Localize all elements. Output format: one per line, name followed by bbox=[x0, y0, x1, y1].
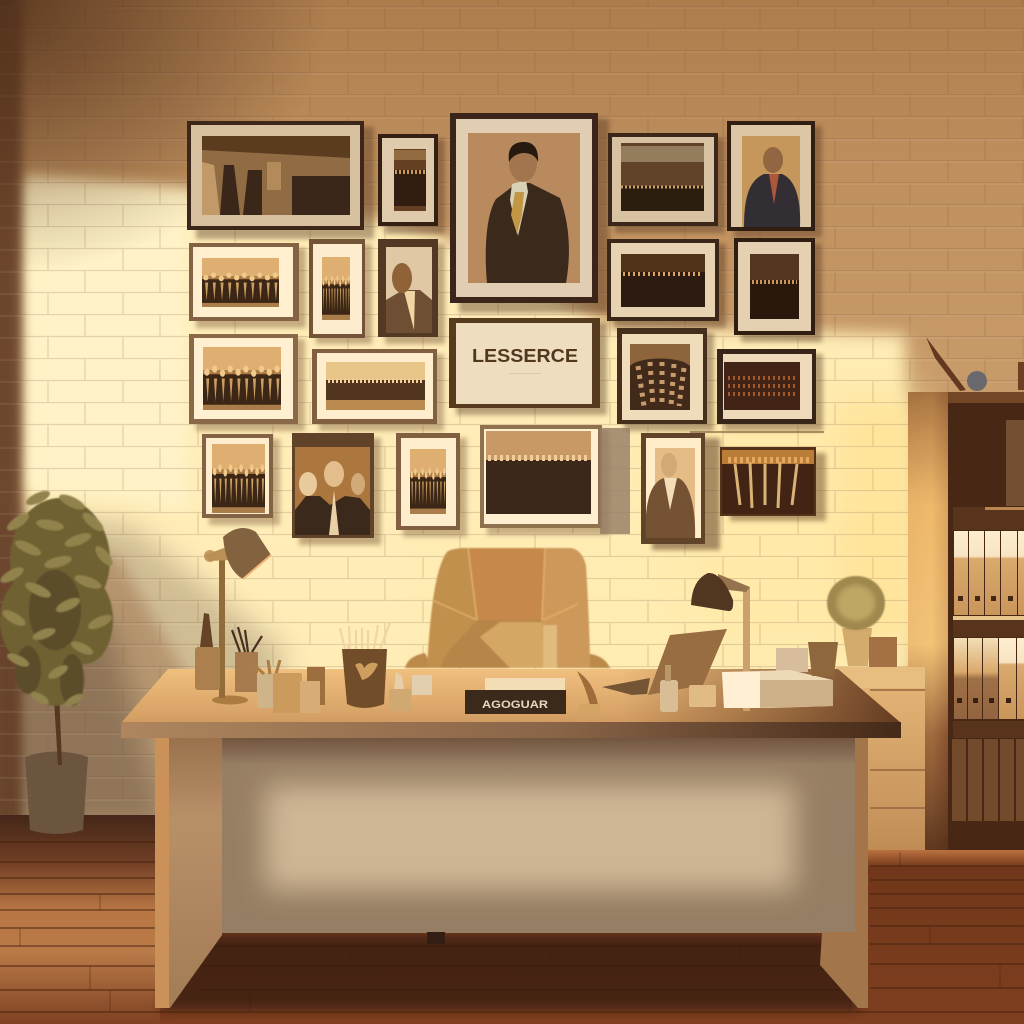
framed photo: crowd row 2 right bbox=[734, 238, 822, 342]
nameplate label: AGOGUAR bbox=[482, 699, 548, 711]
window shaped shadow beside frame bbox=[600, 428, 630, 534]
desk front edge bbox=[121, 722, 901, 738]
plant trunk bbox=[54, 690, 62, 765]
sign small caption: —— —— —— —— bbox=[509, 371, 541, 375]
chair base foot bbox=[427, 932, 445, 944]
small jar bbox=[389, 689, 411, 711]
paper block bbox=[412, 675, 432, 695]
right desk leg bbox=[820, 738, 868, 1008]
framed photo: sepia group dark frame bbox=[720, 447, 826, 521]
small box bbox=[869, 637, 897, 667]
framed photo: colourful crowd bbox=[617, 328, 714, 431]
binders lower shelf bbox=[952, 739, 1024, 821]
framed photo: group row 2 left bbox=[189, 243, 306, 328]
chair centre panel bbox=[468, 548, 545, 620]
framed portrait: man in dark suit bbox=[450, 113, 609, 313]
laptop bbox=[602, 629, 727, 695]
framed photo: dark crowd bbox=[717, 349, 823, 431]
binders middle shelf bbox=[954, 638, 1024, 719]
papers bbox=[776, 648, 808, 672]
framed sign: LESSERCE bbox=[449, 318, 607, 415]
bookcase interior bbox=[948, 392, 1024, 850]
framed photo: narrow crowd row 4 bbox=[396, 433, 467, 537]
stacked white box bbox=[722, 670, 833, 708]
framed photo: tall crowd 1 bbox=[378, 134, 445, 234]
bottle bbox=[660, 680, 678, 712]
framed portrait: man looking down bbox=[378, 239, 445, 344]
desk surface bbox=[121, 669, 901, 737]
plant: left floor plant bbox=[0, 488, 116, 834]
globe and ornament on top bbox=[926, 337, 1024, 391]
framed portrait: man top right bbox=[727, 121, 822, 238]
chair right bolster bbox=[542, 548, 590, 668]
framed photo: narrow group row 2 bbox=[309, 239, 372, 344]
pen holder bbox=[577, 671, 598, 705]
shelf ledge line under frames bbox=[690, 431, 824, 433]
plant foliage bbox=[0, 488, 116, 708]
cup 2 bbox=[235, 652, 258, 692]
main pencil cup bbox=[342, 649, 387, 708]
framed photo: group row 4 left bbox=[202, 434, 280, 525]
bookcase shelves bbox=[953, 507, 1024, 738]
chair seams bbox=[432, 548, 578, 620]
framed photo: wide group row 3 bbox=[312, 349, 444, 431]
framed photo: office room group bbox=[187, 121, 374, 239]
framed photo: three men bbox=[292, 433, 381, 545]
side cabinet with drawers bbox=[836, 667, 925, 850]
cup 1 bbox=[195, 647, 220, 690]
binders upper shelf bbox=[954, 531, 1024, 615]
chair lower panel bbox=[440, 620, 543, 668]
notepad bbox=[485, 678, 565, 691]
mug bbox=[808, 642, 838, 676]
desk: top and front bbox=[121, 669, 901, 1008]
left desk leg bbox=[155, 738, 222, 1008]
cup 3 bbox=[257, 673, 273, 708]
cup 4 bbox=[273, 673, 302, 713]
nameplate bar bbox=[465, 690, 566, 714]
chair arms bbox=[405, 653, 610, 668]
desk modesty panel bbox=[222, 738, 855, 933]
framed photo: wide hall crowd bbox=[608, 133, 725, 233]
desk lamp left bbox=[204, 528, 271, 704]
chair left bolster shade bbox=[427, 548, 477, 668]
bookcase side panel bbox=[908, 392, 948, 850]
chair sunlit patch bbox=[480, 622, 543, 668]
stapler shape bbox=[300, 681, 320, 713]
executive chair bbox=[405, 548, 610, 668]
framed photo: group row 3 left bbox=[189, 334, 305, 431]
desk items right: bottle, mug, box, papers bbox=[660, 642, 838, 712]
framed portrait: man in tan suit bbox=[641, 433, 720, 550]
bag behind stapler bbox=[307, 667, 325, 705]
desk nameplate bbox=[465, 671, 600, 714]
plant pot bbox=[25, 752, 88, 834]
framed photo: crowd row 2 centre right bbox=[607, 239, 726, 328]
framed photo: large crowd row 4 bbox=[480, 425, 609, 535]
pencil cups and stationery bbox=[195, 613, 432, 713]
floor: wooden planks bbox=[0, 815, 1024, 1024]
potted plant on cabinet bbox=[827, 576, 897, 667]
chair back shell bbox=[427, 548, 590, 668]
small mug bbox=[689, 685, 716, 707]
bookcase: right shelving unit bbox=[908, 337, 1024, 850]
desk lamp right bbox=[691, 573, 750, 711]
sign heading: LESSERCE bbox=[472, 345, 578, 366]
